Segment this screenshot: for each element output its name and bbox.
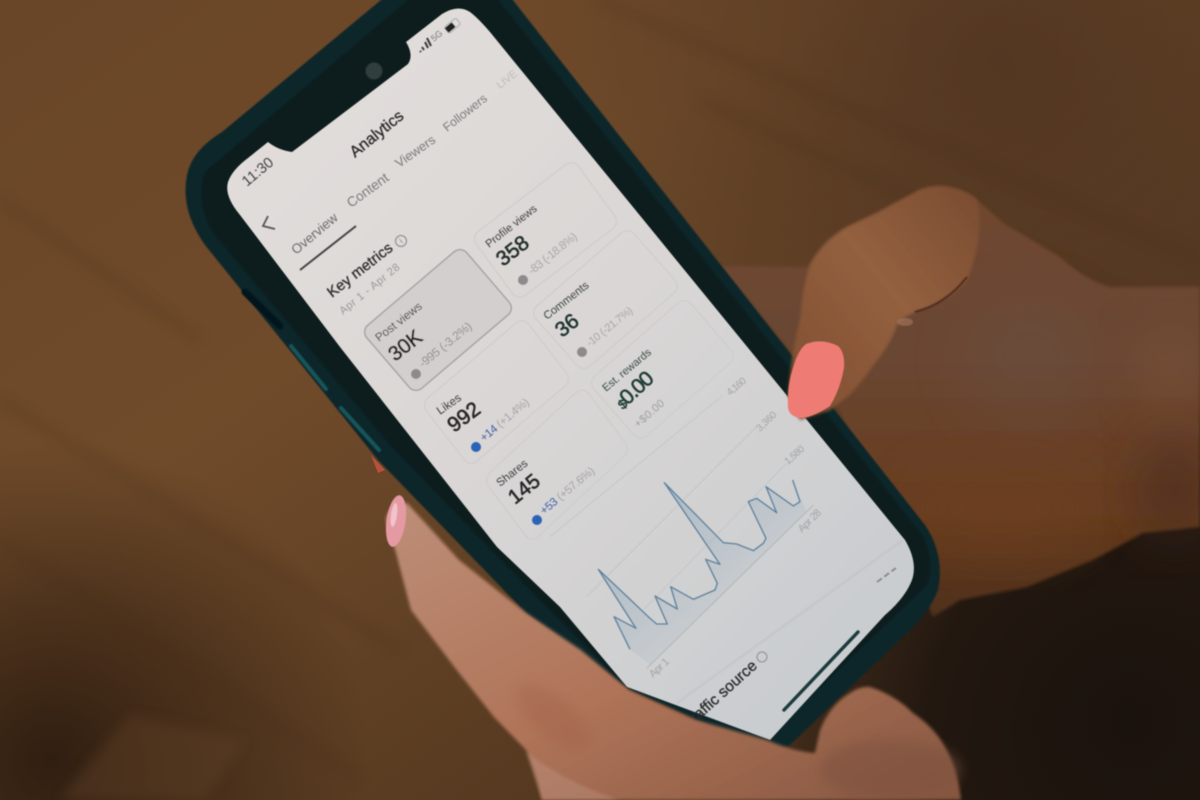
tabs <box>288 68 520 257</box>
metric card: likes: 992 <box>443 398 485 437</box>
metric card: estimated rewards: $0.00 <box>611 367 659 414</box>
metric card: profile views: -83 (-18.8%) <box>526 231 580 277</box>
metric card: post views: 30K <box>384 325 427 366</box>
chart axis labels: 1,580 <box>783 443 807 467</box>
tabs: Followers <box>440 91 490 134</box>
chart axis labels: Apr 28 <box>796 507 824 535</box>
chart axis labels: Apr 1 <box>647 656 672 680</box>
metric card: post views <box>361 246 515 394</box>
phone screen <box>227 8 914 740</box>
right hand palm behind phone <box>720 186 1200 617</box>
metric card: shares: Shares <box>494 458 531 489</box>
right thumb <box>788 186 979 420</box>
metric card: shares <box>483 386 631 543</box>
metric card: estimated rewards <box>588 297 737 442</box>
chart area fill <box>598 480 807 665</box>
home indicator <box>784 632 858 710</box>
see more control <box>877 568 896 582</box>
chart axis labels: 4,160 <box>725 375 749 398</box>
chart axis labels: 3,360 <box>754 409 780 434</box>
line chart <box>550 395 813 668</box>
notch camera <box>366 62 382 80</box>
metric card: estimated rewards: Est. rewards <box>600 346 654 394</box>
title: Analytics <box>347 108 407 161</box>
left hand fingers <box>386 503 961 800</box>
back arrow <box>263 216 275 229</box>
metric card: comments <box>530 227 681 372</box>
metric card: profile views: 358 <box>492 231 534 271</box>
status bar <box>239 18 461 190</box>
key metrics heading: i <box>398 237 405 245</box>
metric card: profile views: Profile views <box>483 203 540 250</box>
tab underline <box>300 226 356 270</box>
key metrics heading: Apr 1 - Apr 28 <box>337 261 402 317</box>
metric card: comments: -10 (-21.7%) <box>584 305 635 349</box>
traffic source heading: Traffic source <box>680 657 761 732</box>
metric card: estimated rewards: +$0.00 <box>632 398 667 430</box>
tabs: Overview <box>288 210 341 257</box>
divider <box>677 540 903 703</box>
metric card: comments: Comments <box>541 279 592 322</box>
metric card: post views: -995 (-3.2%) <box>416 319 475 370</box>
screen content <box>239 18 903 732</box>
metric card: likes: Likes <box>434 391 464 417</box>
side buttons <box>245 292 379 450</box>
tabs: LIVE <box>494 68 520 91</box>
metric card: likes <box>421 317 572 467</box>
status bar: 5G <box>429 28 444 44</box>
chart line <box>598 480 800 649</box>
key metrics heading <box>324 236 406 317</box>
metric card: comments: 36 <box>551 309 583 342</box>
status bar: 11:30 <box>239 155 277 190</box>
tabs: Viewers <box>392 132 438 170</box>
key metrics heading: Key metrics <box>324 240 396 301</box>
chart axis labels <box>647 375 824 680</box>
metric card: profile views <box>471 159 620 301</box>
metric card: likes: +14 (+1.4%) <box>478 396 532 444</box>
chart grid lines <box>550 395 813 668</box>
left finger nail <box>383 494 409 548</box>
tabs: Content <box>344 170 392 210</box>
metric card: shares: +53 (+57.6%) <box>538 465 597 517</box>
metric card: shares: 145 <box>504 469 545 509</box>
hidden finger nail <box>371 455 385 473</box>
thumb nail <box>788 341 844 418</box>
phone body <box>185 0 940 749</box>
metric card: post views: Post views <box>373 300 425 344</box>
